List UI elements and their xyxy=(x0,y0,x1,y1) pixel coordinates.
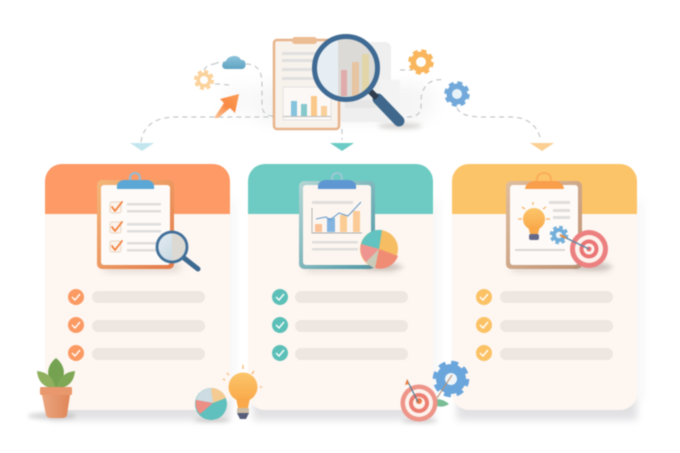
small magnifier xyxy=(157,232,198,269)
text lines xyxy=(549,201,570,219)
card header xyxy=(452,164,637,214)
dashed connector paths xyxy=(141,62,541,142)
checklist clipboard xyxy=(97,173,174,269)
magnified bars xyxy=(318,39,375,97)
report text lines xyxy=(282,52,330,80)
checklist rows xyxy=(110,202,122,252)
panel: left card (orange) xyxy=(45,164,230,410)
infographic canvas xyxy=(28,33,640,426)
icon: orange growth arrow xyxy=(214,94,239,118)
checklist rows with bars xyxy=(272,289,408,361)
main clipboard with report xyxy=(274,37,339,129)
clipboard shadow xyxy=(306,262,396,272)
icon: cloud xyxy=(222,56,246,69)
panel: middle card (teal) xyxy=(248,164,433,410)
clipboard shadow xyxy=(512,262,608,272)
icon: target with arrow xyxy=(400,375,452,423)
magnifying glass xyxy=(314,36,399,121)
checklist rows with bars xyxy=(476,289,613,361)
top backdrop: soft grey band xyxy=(225,86,435,122)
chart clipboard xyxy=(299,173,375,269)
card header xyxy=(45,164,230,214)
idea clipboard xyxy=(506,173,582,269)
checklist rows with bars xyxy=(68,289,205,361)
card header xyxy=(248,164,433,214)
checklist lines xyxy=(127,203,161,252)
shadow under magnifier xyxy=(378,123,422,129)
small gear xyxy=(551,227,567,243)
pie chart xyxy=(360,230,404,270)
icon: blue gear, right xyxy=(446,83,468,105)
panel: right card (yellow) xyxy=(452,164,637,410)
report bar chart xyxy=(283,87,331,120)
icon: beach-ball pie xyxy=(194,388,230,422)
light bulb xyxy=(518,202,550,240)
report sheet behind magnifier xyxy=(338,42,400,122)
bar and line chart xyxy=(312,202,362,233)
card shadows xyxy=(50,200,644,420)
icon: light bulb, large xyxy=(223,365,262,419)
target with dart xyxy=(560,230,613,270)
icon: blue gear, large xyxy=(435,363,467,395)
clipboard clip xyxy=(292,37,317,44)
flow arrowheads xyxy=(130,143,554,151)
icon: small orange gear, left xyxy=(196,72,212,88)
icon: small leaf xyxy=(437,399,449,407)
clipboard shadow xyxy=(104,262,180,272)
icon: potted plant xyxy=(28,358,76,420)
icon: orange gear, right xyxy=(410,51,432,73)
